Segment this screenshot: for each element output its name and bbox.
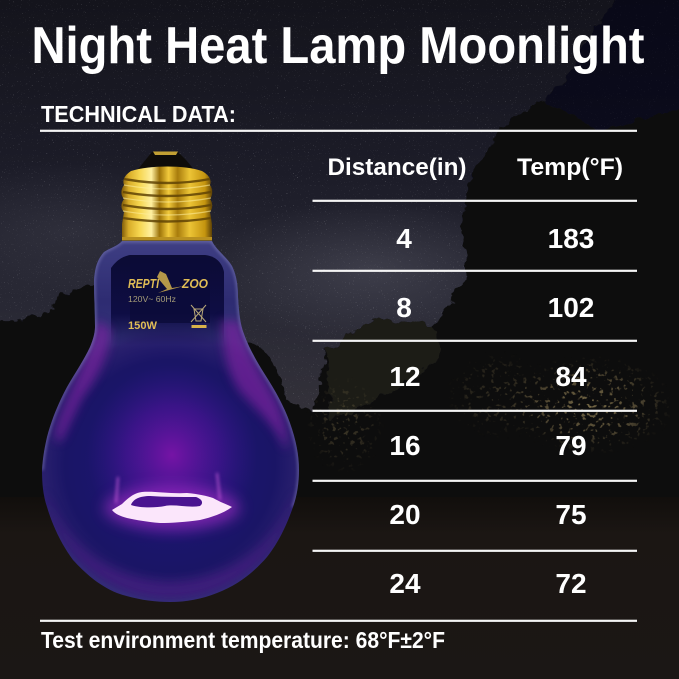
column header: temperature: Temp(°F)	[517, 154, 623, 181]
row: 16 in: 79	[555, 430, 587, 461]
table rules	[40, 130, 637, 622]
row: 8 in: 8	[396, 292, 412, 323]
icon: brand lizard	[157, 271, 184, 293]
row: 24 in	[389, 568, 587, 599]
row: 12 in: 84	[555, 361, 587, 392]
row: 8 in	[396, 292, 594, 323]
row: 8 in: 102	[548, 292, 594, 323]
row: 20 in: 75	[555, 499, 587, 530]
wattage text: 150W	[128, 320, 158, 332]
brand: REPTI ZOO: ZOO	[181, 276, 208, 291]
icon: bulb	[30, 152, 310, 610]
voltage text: 120V~ 60Hz	[128, 294, 176, 304]
row: 4 in: 4	[396, 223, 412, 254]
row: 20 in: 20	[389, 499, 421, 530]
temperature table	[328, 154, 623, 599]
brand: REPTI ZOO: REPTI	[128, 276, 159, 291]
filament	[112, 473, 232, 523]
filament glow	[104, 486, 240, 530]
row: 16 in: 16	[389, 430, 421, 461]
purple side reflections	[55, 320, 287, 450]
icon: recycling mark	[191, 305, 206, 328]
brand: REPTI ZOO	[128, 276, 208, 291]
row: 16 in	[389, 430, 587, 461]
bulb screw base	[121, 166, 212, 240]
row: 12 in	[389, 361, 587, 392]
bulb glass	[42, 241, 299, 602]
core glow	[102, 380, 242, 500]
bulb contact tip	[136, 152, 196, 172]
row: 12 in: 12	[389, 361, 421, 392]
brand label	[128, 271, 208, 332]
heading: technical data: TECHNICAL DATA:	[41, 101, 236, 127]
column header: distance: Distance(in)	[328, 154, 466, 181]
footnote: Test environment temperature: 68°F±2°F	[41, 627, 445, 653]
lower rim purple	[59, 526, 282, 598]
row: 4 in	[396, 223, 594, 254]
row: 20 in	[389, 499, 587, 530]
rim highlight	[42, 241, 299, 507]
row: 4 in: 183	[548, 223, 594, 254]
row: 24 in: 72	[555, 568, 587, 599]
dark label panel	[111, 255, 224, 345]
neck side shading	[94, 241, 240, 320]
row: 24 in: 24	[389, 568, 421, 599]
